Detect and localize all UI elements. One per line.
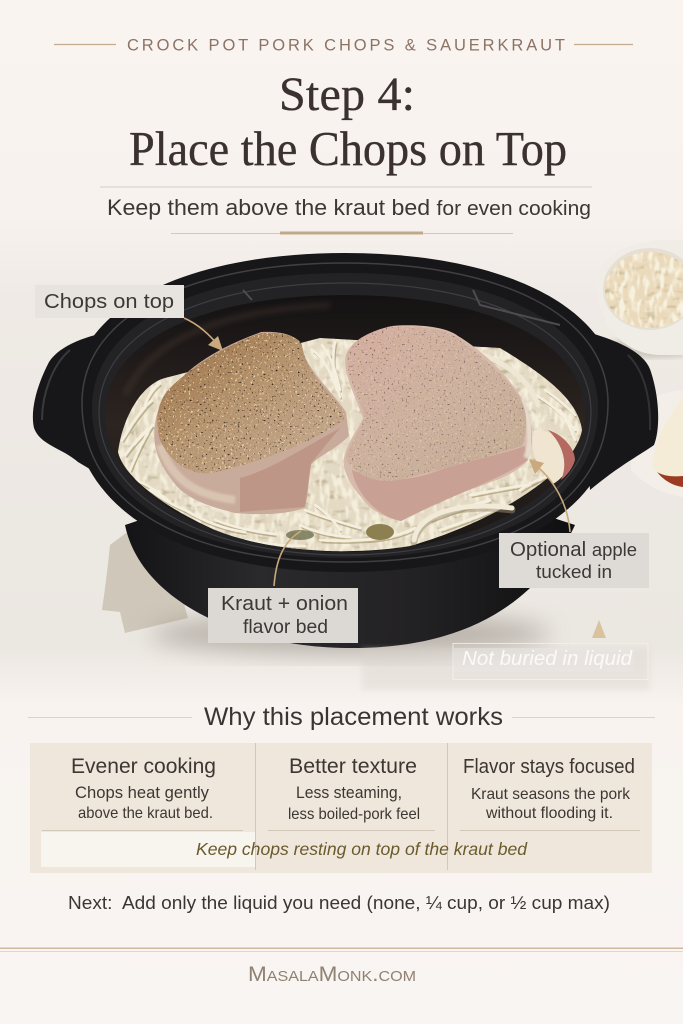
column: better texture: Less steaming, (296, 784, 402, 802)
shadow (150, 614, 550, 654)
herbs (366, 524, 394, 540)
apple slice (532, 430, 574, 484)
side plate with apple slices (631, 390, 683, 497)
rim notches (243, 290, 560, 325)
pot body (125, 450, 575, 648)
note: not buried in liquid (453, 644, 648, 680)
footer brand: MasalaMonk.com (248, 963, 416, 986)
column: better texture: Better texture (289, 754, 417, 778)
column: flavor stays focused (463, 756, 635, 822)
column: better texture: less boiled-pork feel (288, 806, 420, 823)
title: Step 4: (279, 68, 415, 121)
callout: chops on top (35, 285, 223, 351)
column: evener cooking: Evener cooking (71, 754, 216, 778)
callout: kraut + onion: flavor bed (243, 616, 328, 638)
section heading: Why this placement works (204, 703, 503, 731)
small triangle mark (592, 620, 606, 638)
panel tip: Keep chops resting on top of the kraut bed (196, 839, 528, 859)
panel: why it works (30, 743, 652, 873)
pork chop left (150, 330, 350, 514)
sauerkraut bed (118, 338, 582, 552)
right handle (580, 330, 658, 490)
callout: kraut + onion: Kraut + onion (221, 592, 348, 615)
slow cooker (33, 253, 658, 654)
subtitle: Keep them above the kraut bed for even cooking (107, 195, 591, 220)
callout: chops on top: Chops on top (44, 290, 174, 313)
inner wall (105, 295, 585, 552)
column: flavor stays focused: without flooding it. (485, 805, 613, 822)
column: flavor stays focused: Kraut seasons the pork (471, 786, 631, 803)
callout: optional apple: Optional apple (510, 538, 637, 561)
next step: Next: Add only the liquid you need (none, ¼ cup, or ½ cup max) (68, 892, 610, 913)
column: flavor stays focused: Flavor stays focused (463, 756, 635, 778)
title (129, 68, 567, 176)
eyebrow title: CROCK POT PORK CHOPS & SAUERKRAUT (127, 36, 565, 54)
title: Place the Chops on Top (129, 123, 567, 176)
left handle (33, 331, 150, 490)
arrowhead (529, 459, 544, 474)
onion rings (195, 352, 538, 542)
pork chop right (340, 322, 535, 521)
linen towel (102, 530, 188, 633)
column: evener cooking: Chops heat gently (75, 784, 210, 802)
column: evener cooking (71, 754, 216, 822)
column: better texture (288, 754, 420, 823)
rim (72, 253, 618, 572)
note: not buried in liquid: Not buried in liquid (462, 648, 633, 670)
callout: optional apple: tucked in (536, 561, 612, 582)
callout: optional apple (499, 459, 649, 588)
faint ghost panel behind note (362, 648, 650, 690)
arrowhead (208, 336, 223, 351)
footer rules (0, 948, 683, 952)
column: evener cooking: above the kraut bed. (78, 805, 213, 822)
side bowl of rice (603, 248, 683, 360)
callout: kraut + onion (208, 531, 358, 643)
